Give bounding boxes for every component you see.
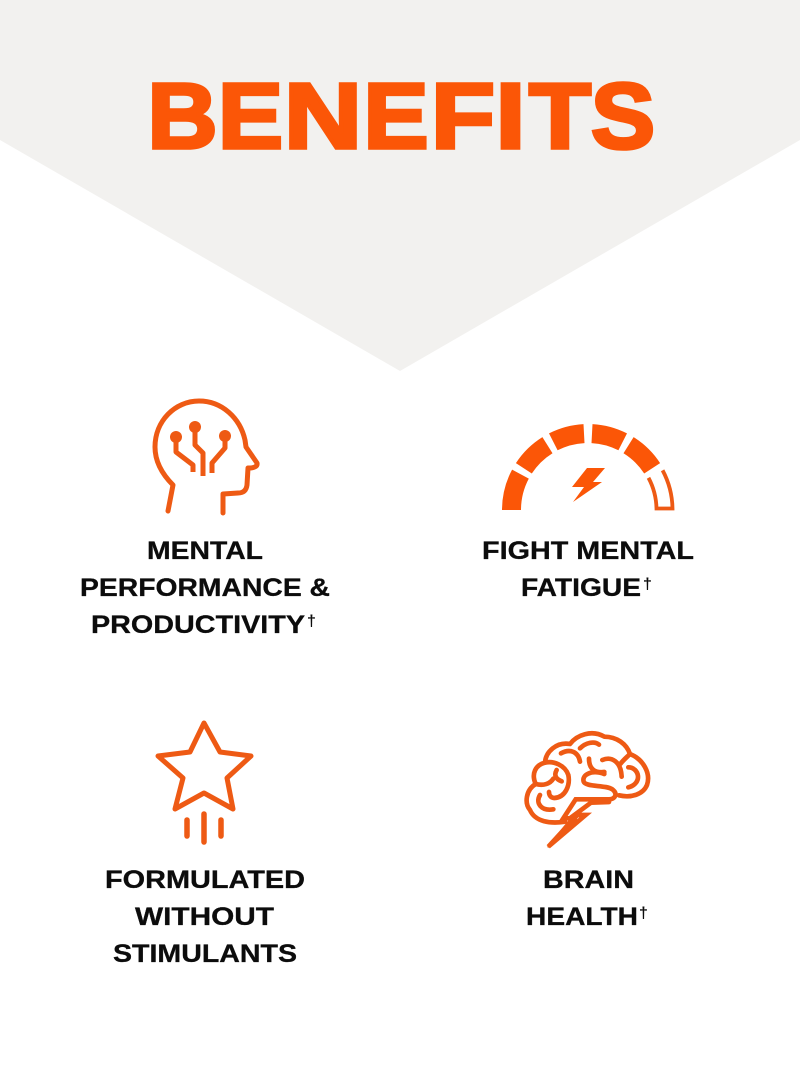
label: brain health: † (639, 905, 648, 922)
label: mental performance and productivity: † (307, 613, 316, 630)
label: fight mental fatigue: † (643, 576, 652, 593)
label: fight mental fatigue: FATIGUE (521, 574, 641, 602)
title: N (284, 64, 362, 168)
title: E (364, 64, 428, 168)
label: fight mental fatigue (482, 537, 694, 602)
label: formulated without stimulants: STIMULANTS (113, 940, 297, 968)
label: formulated without stimulants (105, 866, 305, 968)
icon: brain with lightning bolt (527, 733, 648, 847)
label: mental performance and productivity: MENTAL (147, 537, 263, 565)
label: fight mental fatigue: FIGHT MENTAL (482, 537, 694, 565)
icon: star with motion bars (158, 723, 251, 842)
label: formulated without stimulants: FORMULATED (105, 866, 305, 894)
benefit: brain health (526, 733, 648, 931)
icon: head with circuits (155, 401, 257, 513)
header chevron background (0, 0, 800, 371)
title: T (529, 64, 591, 168)
label: brain health: BRAIN (543, 866, 634, 894)
label: formulated without stimulants: WITHOUT (135, 903, 274, 931)
benefit: formulated without stimulants (105, 723, 305, 968)
title: B (148, 64, 218, 168)
label: mental performance and productivity: PERFORMANCE & (80, 574, 330, 602)
title: I (496, 64, 526, 168)
benefit: fight mental fatigue (482, 424, 694, 602)
title: E (218, 64, 283, 168)
label: brain health (526, 866, 648, 931)
title: S (591, 64, 655, 168)
benefit: mental performance (80, 401, 330, 639)
label: brain health: HEALTH (526, 903, 638, 931)
label: mental performance and productivity (80, 537, 330, 639)
title: F (431, 64, 495, 168)
icon: gauge with lightning bolt (502, 424, 672, 510)
label: mental performance and productivity: PRODUCTIVITY (91, 611, 305, 639)
